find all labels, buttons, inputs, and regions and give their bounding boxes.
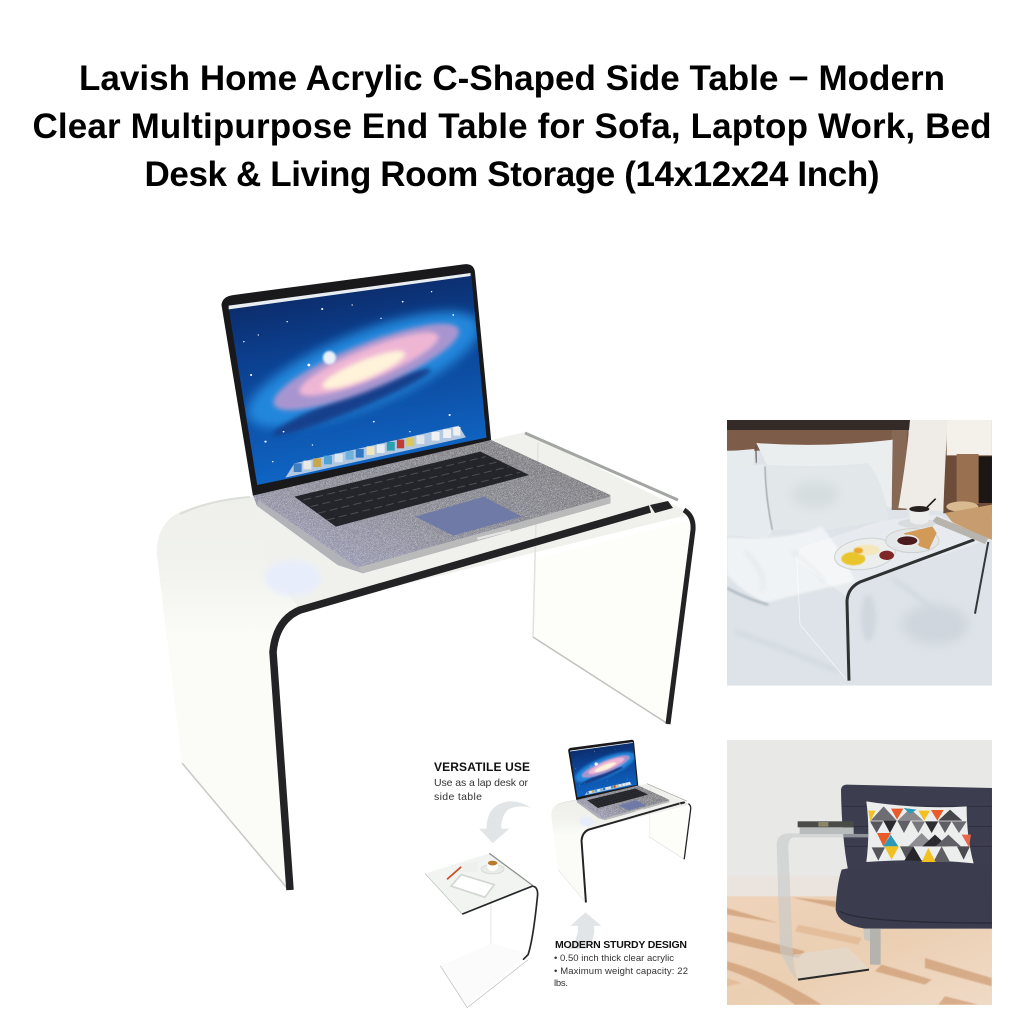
wall (727, 740, 992, 880)
versatile use description (434, 777, 528, 803)
sofa seat (836, 863, 992, 929)
versatile use heading: VERSATILE USE (434, 760, 530, 774)
arrow: up to lap desk (567, 912, 601, 949)
bedding background (727, 420, 992, 686)
blanket (727, 526, 855, 603)
acrylic C-table (777, 827, 869, 981)
inset product with laptop (550, 740, 691, 902)
pillows (727, 440, 893, 538)
coffee cup (898, 499, 936, 528)
title (32, 59, 992, 194)
acrylic table top (832, 515, 980, 596)
title: Clear Multipurpose End Table for Sofa, Laptop Work, Bed (32, 107, 992, 146)
panel: versatile use inset diagram (425, 740, 691, 1008)
versatile use description: Use as a lap desk or (434, 777, 528, 789)
breakfast plate (834, 538, 896, 570)
curtain (898, 420, 948, 511)
lamp and side furniture (943, 420, 992, 540)
modern sturdy design heading: MODERN STURDY DESIGN (555, 939, 687, 951)
panel: sofa photo (727, 740, 992, 1005)
arrow: to side table (479, 801, 531, 843)
wooden floor (727, 896, 992, 1005)
modern sturdy design bullet list: • 0.50 inch thick clear acrylic (554, 953, 674, 964)
table front edge (847, 540, 974, 681)
table right leg (975, 542, 988, 614)
title: Lavish Home Acrylic C-Shaped Side Table − Modern (79, 59, 945, 98)
modern sturdy design bullet list: lbs. (554, 978, 568, 989)
geometric pillow (866, 801, 974, 863)
main product image: laptop on acrylic table (150, 264, 693, 890)
modern sturdy design bullet list: • Maximum weight capacity: 22 (554, 966, 688, 977)
panel: bed photo (727, 420, 992, 686)
title: Desk & Living Room Storage (14x12x24 Inch) (144, 155, 880, 194)
baseboard (727, 876, 840, 896)
modern sturdy design bullet list (554, 953, 688, 989)
toast and jam plate (886, 526, 939, 553)
sofa metal leg (863, 929, 881, 965)
sofa back (841, 785, 992, 871)
C-table illustration (425, 853, 538, 1008)
books on table (798, 821, 854, 827)
versatile use description: side table (434, 791, 482, 803)
